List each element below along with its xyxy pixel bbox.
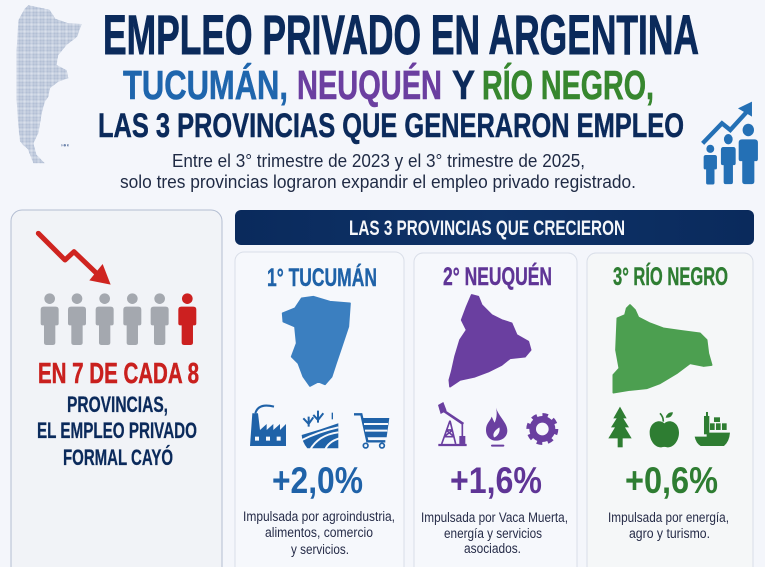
description: Río Negro: Impulsada por energía, <box>608 510 729 525</box>
subtitle: provinces: Y <box>452 62 475 108</box>
description: Tucumán: Impulsada por agroindustria, <box>243 509 395 524</box>
description: Tucumán <box>243 509 395 557</box>
map: Tucumán <box>283 297 350 386</box>
icon: falling red arrow <box>38 233 111 285</box>
description: Neuquén: energía y servicios <box>444 526 542 541</box>
intro text: Entre el 3° trimestre de 2023 y el 3° trimestre de 2025, <box>172 150 585 171</box>
description: Tucumán: y servicios. <box>291 542 349 557</box>
subtitle: provinces: TUCUMÁN, <box>123 62 288 108</box>
heading: Neuquén: 2° NEUQUÉN <box>443 262 552 291</box>
subtitle: provinces: NEUQUÉN <box>297 62 442 108</box>
description: Neuquén: asociados. <box>464 541 521 556</box>
icon: six people, one red <box>41 293 196 345</box>
panel: Tucumán <box>235 252 404 567</box>
description: Neuquén: Impulsada por Vaca Muerta, <box>421 510 568 525</box>
value: +1,6%: +1,6% <box>450 460 542 501</box>
panel: Río Negro <box>587 253 753 567</box>
map: Neuquén <box>449 295 531 387</box>
icons: factory, farm field, cart <box>250 406 389 450</box>
description: Tucumán: alimentos, comercio <box>265 525 373 540</box>
statement text: EL EMPLEO PRIVADO <box>37 418 197 443</box>
subtitle: provinces <box>123 62 654 108</box>
statement text: FORMAL CAYÓ <box>63 445 173 470</box>
section header bar <box>235 210 754 245</box>
description: Río Negro <box>608 510 729 541</box>
map of Argentina in dots <box>17 5 82 163</box>
icons: tree, apple, cargo ship <box>608 407 730 447</box>
map: Río Negro <box>613 305 712 393</box>
description: Neuquén <box>421 510 568 556</box>
icons: oil pump, gas flame, gear <box>438 402 556 446</box>
value: +0,6%: +0,6% <box>625 460 718 501</box>
section header bar: LAS 3 PROVINCIAS QUE CRECIERON <box>349 217 625 240</box>
intro text: solo tres provincias lograron expandir el empleo privado registrado. <box>120 171 636 192</box>
statement text <box>37 392 197 470</box>
heading: Tucumán: 1° TUCUMÁN <box>267 263 377 292</box>
intro text <box>120 150 636 192</box>
value: +2,0%: +2,0% <box>272 460 363 501</box>
subtitle: provinces: RÍO NEGRO, <box>482 62 654 108</box>
panel: provinces where employment fell <box>11 210 222 567</box>
panel: Neuquén <box>414 253 577 567</box>
statistic: 7 of 8: EN 7 DE CADA 8 <box>38 358 199 390</box>
statement text: PROVINCIAS, <box>67 392 168 417</box>
icon: growth arrow and people <box>703 102 758 184</box>
description: Río Negro: agro y turismo. <box>629 526 710 541</box>
